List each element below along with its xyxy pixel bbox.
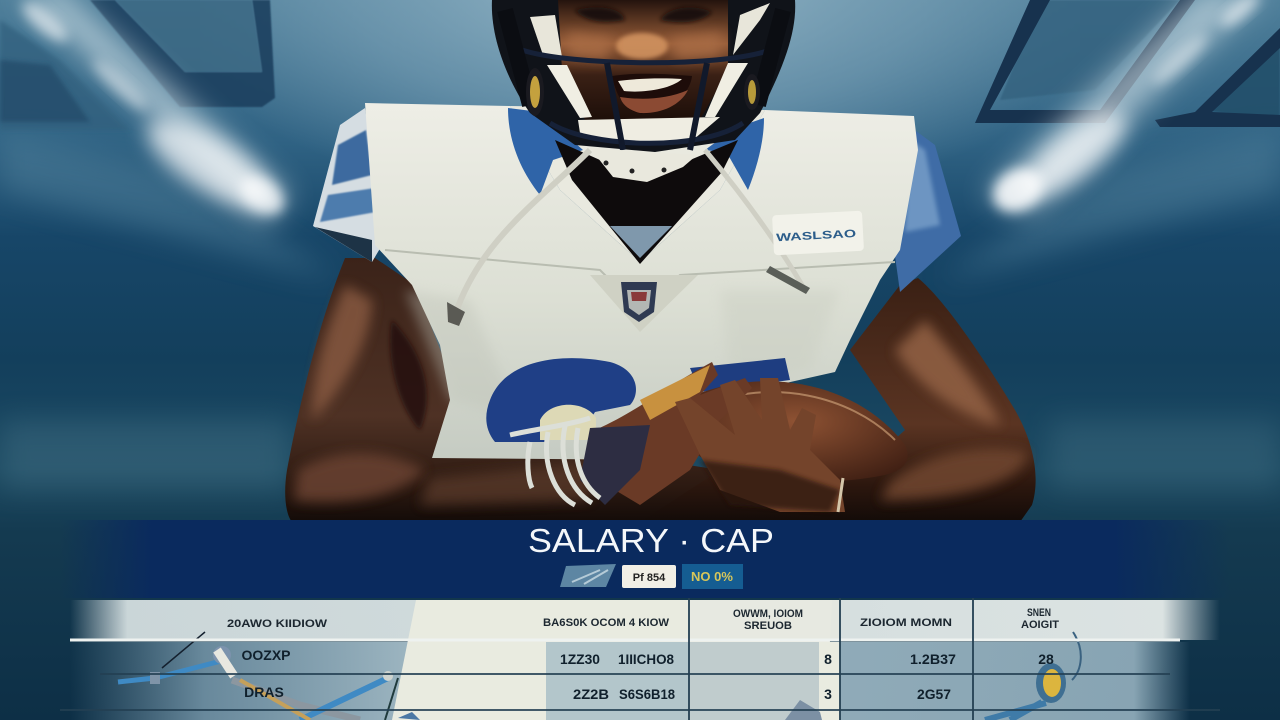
right arm xyxy=(640,278,1036,522)
badge: white tag xyxy=(622,565,676,588)
table values: DRAS xyxy=(244,684,284,700)
badge: stripes xyxy=(560,564,616,587)
badge: blue tag xyxy=(682,564,743,589)
blue collar xyxy=(508,108,583,195)
right hand xyxy=(675,378,845,512)
column headers xyxy=(227,607,1059,632)
helmet xyxy=(492,0,795,182)
table values: 8 xyxy=(824,651,832,667)
table values: 28 xyxy=(1038,651,1054,667)
left sleeve xyxy=(313,108,385,262)
chin strap xyxy=(590,148,697,182)
right floodlights glow xyxy=(985,0,1265,220)
wrist tape xyxy=(510,418,600,505)
table header band xyxy=(70,600,1220,640)
table values xyxy=(241,647,1054,702)
chest name patch: WASLSAO xyxy=(776,228,857,244)
eye shadows xyxy=(575,7,712,22)
chest name patch xyxy=(772,211,864,255)
table values: 1.2B37 xyxy=(910,651,956,667)
table lines xyxy=(70,638,1180,642)
column headers: SREUOB xyxy=(744,620,792,632)
jersey xyxy=(365,103,918,460)
table values: S6S6B18 xyxy=(619,686,675,702)
table values: 2G57 xyxy=(917,686,951,702)
left hand with tape xyxy=(590,362,752,505)
left arm xyxy=(285,258,720,522)
table values: OOZXP xyxy=(241,647,291,663)
title text: SALARY · CAP xyxy=(528,522,774,559)
salary table xyxy=(60,598,1220,720)
left floodlights glow xyxy=(17,0,290,225)
title banner xyxy=(60,520,1230,598)
badge: blue tag: NO 0% xyxy=(691,569,733,584)
mouth xyxy=(612,74,692,114)
right diagram strokes xyxy=(785,632,1081,720)
strap ends xyxy=(447,302,465,326)
column headers: 20AWO KIIDIOW xyxy=(227,618,328,630)
football xyxy=(683,381,908,482)
badge: white tag: Pf 854 xyxy=(633,572,666,584)
face xyxy=(558,0,728,125)
table values: 3 xyxy=(824,686,832,702)
undershirt v xyxy=(610,226,672,258)
right sleeve xyxy=(890,128,961,292)
jersey shading xyxy=(385,250,895,420)
jersey neckline fill xyxy=(510,106,765,262)
column headers: BA6S0K OCOM 4 KIOW xyxy=(543,617,670,629)
left stadium light truss xyxy=(0,0,275,130)
football player xyxy=(285,0,1036,522)
table rows band xyxy=(70,642,1190,720)
neck xyxy=(555,140,738,264)
facemask bars xyxy=(522,50,770,63)
jersey number xyxy=(486,358,636,442)
right arm highlights xyxy=(880,320,1028,500)
table values: 1ZZ30 xyxy=(560,651,600,667)
column headers: AOIGIT xyxy=(1021,619,1059,631)
column headers: SNEN xyxy=(1027,607,1051,619)
chin straps xyxy=(455,150,590,315)
jersey through table xyxy=(392,600,832,720)
right stadium light truss xyxy=(975,0,1280,127)
column headers: ZIOIOM MOMN xyxy=(860,617,952,629)
table values: 1IIICHO8 xyxy=(618,651,674,667)
white helmet panels xyxy=(530,3,770,57)
table values: 2Z2B xyxy=(573,686,609,702)
column headers: OWWM, IOIOM xyxy=(733,608,803,620)
left diagram strokes xyxy=(118,632,420,720)
helmet gold emblems xyxy=(526,68,544,116)
ring xyxy=(838,478,843,512)
left arm highlights xyxy=(294,285,590,505)
chest nfl shield xyxy=(621,282,657,322)
